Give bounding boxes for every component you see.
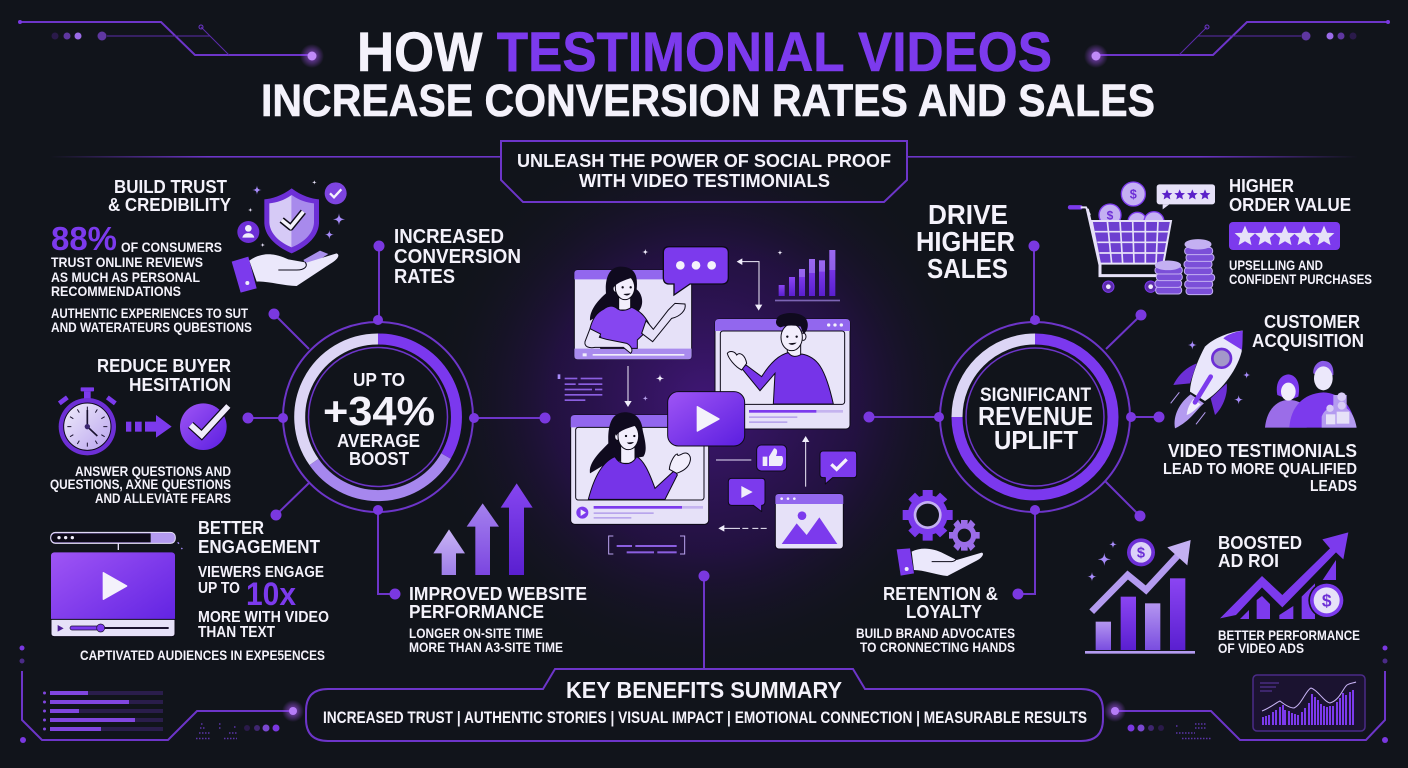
arrow: up to man window	[804, 440, 807, 487]
heading: boosted ad roi: AD ROI	[1218, 550, 1279, 571]
text block: retention	[856, 583, 1015, 655]
icon: shopping cart with coins	[1070, 182, 1215, 295]
text block: improved website performance: IMPROVED WEBSITE	[409, 583, 587, 604]
ring text: AVERAGE	[337, 430, 420, 451]
heading: boosted ad roi	[1218, 532, 1302, 571]
arrowhead up	[802, 436, 809, 442]
text block: answer questions: QUESTIONS, AXNE QUESTIONS	[50, 476, 231, 492]
ring text	[323, 369, 435, 469]
heading: customer acquisition: ACQUISITION	[1252, 330, 1364, 351]
text block: answer questions: ANSWER QUESTIONS AND	[75, 463, 231, 479]
panel: customer acquisition	[1163, 311, 1364, 495]
ring text: REVENUE	[978, 401, 1093, 431]
text block: video testimonials lead: LEAD TO MORE QUALIFIED	[1163, 461, 1357, 478]
summary list: INCREASED TRUST | AUTHENTIC STORIES | VISUAL IMPACT | EMOTIONAL CONNECTION | MEASURABLE RESULTS	[323, 708, 1087, 727]
decorative circuit: bottom left with progress bars	[20, 646, 304, 743]
title: INCREASE CONVERSION RATES AND SALES	[261, 75, 1155, 126]
text block: better performance: BETTER PERFORMANCE	[1218, 627, 1360, 643]
heading: drive higher sales	[916, 199, 1015, 284]
stat: viewers engage 10x: MORE WITH VIDEO	[198, 609, 329, 626]
heading: boosted ad roi: BOOSTED	[1218, 532, 1302, 553]
icon: thumbs up	[716, 445, 787, 471]
text block: retention: TO CRONNECTING HANDS	[860, 639, 1015, 655]
text block: improved website performance: MORE THAN A3-SITE TIME	[409, 639, 563, 655]
heading: build trust: BUILD TRUST	[114, 176, 228, 197]
panel: video window man	[715, 313, 850, 429]
title	[261, 20, 1155, 126]
arrowhead down	[624, 401, 632, 407]
stat: viewers engage 10x	[198, 564, 329, 641]
text block: retention: BUILD BRAND ADVOCATES	[856, 625, 1015, 641]
text block: retention: RETENTION &	[883, 583, 998, 604]
icon: growth bar chart with coin	[1085, 538, 1195, 654]
text block: answer questions: AND ALLEVIATE FEARS	[95, 490, 231, 506]
icon: shopping cart with coins: $	[1130, 187, 1137, 201]
heading: higher order value: ORDER VALUE	[1229, 194, 1351, 215]
subtitle banner: UNLEASH THE POWER OF SOCIAL PROOF	[517, 151, 891, 171]
heading: increased conversion rates: INCREASED	[394, 226, 504, 248]
text block: answer questions	[50, 463, 231, 506]
ring segment: lavender	[314, 456, 446, 496]
ring text: +34%	[323, 388, 435, 434]
icon: shopping cart with coins: $	[1107, 208, 1114, 222]
heading: higher order value	[1229, 175, 1351, 215]
left ring: up to +34%	[242, 240, 550, 600]
text block: upselling: CONFIDENT PURCHASES	[1229, 271, 1372, 287]
decorative circuit: bottom right with mini chart	[1104, 646, 1388, 743]
icon: large play button	[668, 392, 745, 446]
heading: customer acquisition	[1252, 311, 1364, 351]
icon: gears on hand	[897, 490, 983, 576]
panel: retention & loyalty	[856, 490, 1015, 655]
central illustration: video testimonials	[558, 247, 857, 554]
icon: roi arrow with coin	[1220, 532, 1348, 619]
ring text: SIGNIFICANT	[980, 385, 1091, 406]
heading: reduce buyer hesitation: HESITATION	[129, 374, 231, 395]
panel: boosted ad roi	[1085, 532, 1360, 656]
ring segment: pale	[957, 339, 1035, 417]
heading: better engagement	[198, 517, 321, 557]
title: HOW TESTIMONIAL VIDEOS	[357, 20, 1052, 83]
panel: higher order value	[1070, 175, 1372, 295]
panel: video window woman one	[574, 247, 728, 359]
icon: image window	[775, 494, 843, 549]
stat: viewers engage 10x: VIEWERS ENGAGE	[198, 564, 324, 581]
arrow: dashed to the left	[718, 525, 767, 532]
text block: retention: LOYALTY	[906, 601, 983, 622]
heading: increased conversion rates: RATES	[394, 266, 455, 288]
ring segment: purple	[957, 339, 1113, 495]
heading: drive higher sales: HIGHER	[916, 226, 1015, 257]
heading: better engagement: BETTER	[198, 517, 264, 538]
arrowheads top	[737, 258, 762, 311]
text block: improved website performance: LONGER ON-SITE TIME	[409, 625, 543, 641]
centre glow	[425, 125, 985, 675]
text block: improved website performance: PERFORMANCE	[409, 601, 544, 622]
stat: 88% of consumers	[51, 220, 222, 299]
divider lines	[50, 156, 1358, 158]
stat: viewers engage 10x: THAN TEXT	[198, 624, 275, 641]
heading: higher order value: HIGHER	[1229, 175, 1294, 196]
icon: play bubble	[728, 478, 765, 512]
icon: bracketed text lines	[609, 536, 685, 554]
panel: better engagement	[51, 517, 329, 663]
icon: check bubble	[820, 451, 857, 484]
panel: video window woman two	[571, 412, 709, 524]
icon: stopwatch, arrow and check	[59, 387, 228, 455]
text block: video testimonials lead	[1163, 440, 1357, 495]
text block: video testimonials lead: VIDEO TESTIMONIALS	[1168, 440, 1357, 461]
arrow: window one to window three	[626, 366, 629, 403]
icon: rocket	[1171, 331, 1250, 428]
ring text: UP TO	[353, 369, 405, 390]
stat: viewers engage 10x: UP TO	[198, 580, 240, 597]
text block: authentic experiences	[51, 305, 252, 335]
text block: upselling: UPSELLING AND	[1229, 257, 1323, 273]
heading: increased conversion rates: CONVERSION	[394, 246, 521, 268]
icon: growth bar chart with coin: $	[1137, 546, 1145, 562]
text block: improved website performance	[409, 583, 587, 655]
text block: authentic experiences: AUTHENTIC EXPERIENCES TO SUT	[51, 305, 248, 321]
ring text: BOOST	[349, 448, 410, 469]
text block: better performance: OF VIDEO ADS	[1218, 640, 1304, 656]
heading: drive higher sales: DRIVE	[928, 199, 1008, 230]
stat: 88% of consumers: 88%	[51, 220, 117, 257]
text block: upselling	[1229, 257, 1372, 287]
stat: 88% of consumers: TRUST ONLINE REVIEWS	[51, 254, 203, 270]
panel: build trust & credibility	[51, 176, 347, 335]
subtitle banner: WITH VIDEO TESTIMONIALS	[579, 171, 830, 191]
decorative circuit: top right	[1084, 20, 1390, 68]
panel: reduce buyer hesitation	[50, 355, 231, 506]
icon: three rising arrows	[433, 483, 533, 575]
icon: video player	[51, 532, 182, 637]
subtitle banner	[501, 141, 907, 202]
text block: video testimonials lead: LEADS	[1310, 478, 1357, 495]
stat: 88% of consumers: OF CONSUMERS	[121, 239, 222, 255]
stat: 88% of consumers: RECOMMENDATIONS	[51, 283, 181, 299]
stat: viewers engage 10x: 10x	[246, 576, 296, 612]
ring text: UPLIFT	[994, 425, 1078, 455]
heading: better engagement: ENGAGEMENT	[198, 536, 321, 557]
caption: captivated audiences: CAPTIVATED AUDIENCES IN EXPE5ENCES	[80, 647, 325, 663]
mini chart panel	[1253, 675, 1365, 731]
heading: reduce buyer hesitation	[97, 355, 231, 395]
heading: customer acquisition: CUSTOMER	[1264, 311, 1360, 332]
decorative circuit: top left	[18, 20, 324, 68]
icon: roi arrow with coin: $	[1322, 591, 1332, 611]
heading: key benefits summary: KEY BENEFITS SUMMARY	[566, 677, 842, 703]
chart: rising bars	[775, 250, 840, 301]
right ring: significant revenue uplift	[864, 240, 1164, 600]
text block: better performance	[1218, 627, 1360, 656]
heading: increased conversion rates	[394, 226, 521, 288]
connector to summary	[698, 570, 710, 669]
ring text	[978, 385, 1093, 455]
ring segment: purple	[378, 339, 456, 456]
rating: five stars	[1229, 222, 1340, 250]
icon: shield on open hand	[232, 180, 347, 293]
heading: drive higher sales: SALES	[927, 253, 1008, 284]
heading: build trust	[108, 176, 232, 215]
heading: reduce buyer hesitation: REDUCE BUYER	[97, 355, 231, 376]
heading: build trust: & CREDIBILITY	[108, 194, 232, 215]
stat: 88% of consumers: AS MUCH AS PERSONAL	[51, 269, 200, 285]
text lines: left note	[558, 249, 664, 401]
ring segment: pale	[300, 339, 378, 462]
icon: customers group	[1265, 361, 1357, 428]
panel: key benefits summary	[306, 669, 1103, 741]
arrow: speech to man	[740, 262, 759, 306]
text block: authentic experiences: AND WATERATEURS QUBESTIONS	[51, 319, 252, 335]
